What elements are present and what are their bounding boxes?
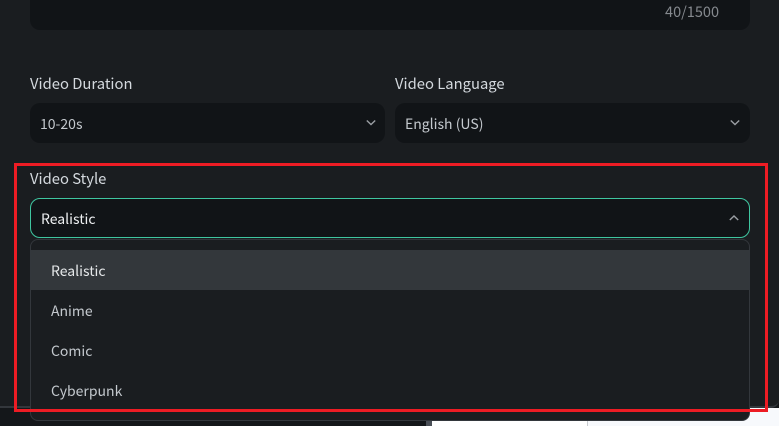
- label: video language: Video Language: [395, 73, 505, 94]
- icon: chevron down: [366, 120, 376, 126]
- style value: Realistic: [41, 209, 96, 229]
- option: Anime: Anime: [51, 301, 93, 321]
- text prompt field: [30, 0, 750, 30]
- option: Cyberpunk: Cyberpunk: [51, 381, 122, 401]
- red highlight rectangle: [14, 163, 768, 412]
- select: video language: [395, 103, 750, 143]
- background: page behind the panel: [0, 408, 779, 426]
- select: video style, focused: [30, 198, 750, 238]
- duration value: 10-20s: [40, 114, 82, 134]
- option: Realistic, highlighted: [31, 250, 749, 290]
- dropdown menu: [30, 239, 750, 421]
- pale region at bottom right: [587, 408, 779, 426]
- label: video duration: Video Duration: [30, 73, 132, 94]
- icon: chevron down: [730, 120, 740, 126]
- teal sliver of element behind the dropdown: [749, 351, 750, 373]
- icon: chevron up: [730, 215, 738, 220]
- option: Comic: Comic: [51, 341, 92, 361]
- light area at lower right: [426, 408, 779, 426]
- option: Realistic, highlighted: Realistic: [51, 261, 106, 281]
- sidebar sliver at bottom: [426, 421, 432, 426]
- select: video duration: [30, 103, 385, 143]
- character counter: 40/1500: [665, 1, 719, 22]
- language value: English (US): [405, 114, 483, 134]
- label: video style: Video Style: [30, 168, 106, 189]
